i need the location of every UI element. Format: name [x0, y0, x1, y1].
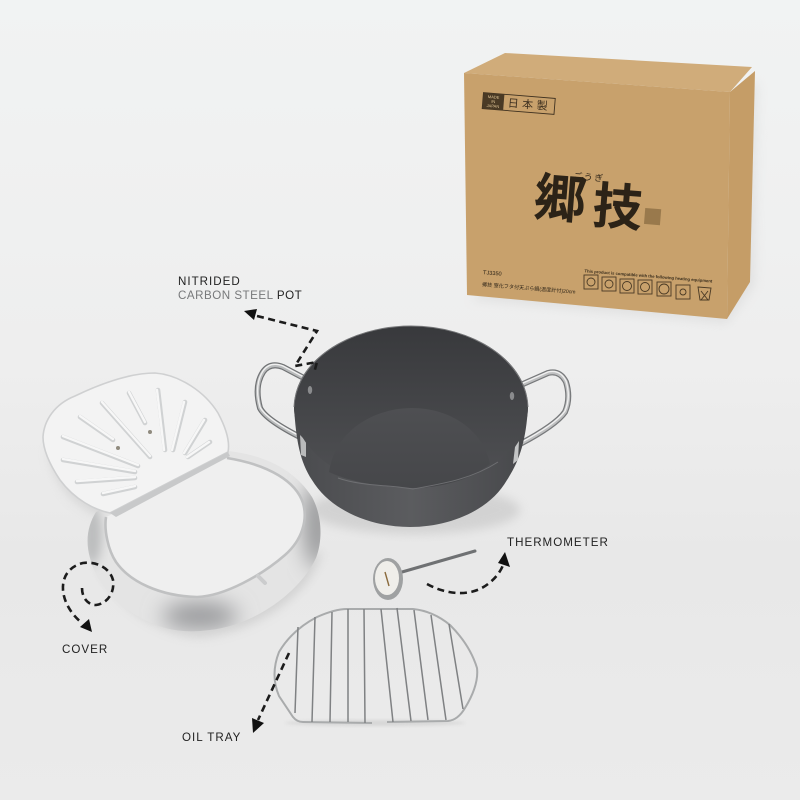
- pot interior: [294, 326, 528, 488]
- model number: TJ3350: [483, 270, 502, 278]
- cover inner lip: [105, 458, 305, 597]
- brand logo: ごうぎ: [573, 170, 605, 184]
- arrow: oil tray: [252, 653, 289, 733]
- label: oil tray: OIL TRAY: [182, 731, 241, 744]
- pot floor: [329, 408, 490, 488]
- oil tray: [274, 608, 477, 726]
- label: thermometer: THERMOMETER: [507, 536, 609, 549]
- tray frame: [274, 609, 477, 723]
- label: nitrided carbon steel pot: CARBON STEEL POT: [178, 289, 302, 302]
- left handle: [258, 364, 302, 438]
- box side: [727, 71, 755, 319]
- arrow: thermometer: [427, 552, 510, 593]
- made in japan badge: JAPAN: [486, 103, 500, 109]
- box top flap: [464, 53, 752, 92]
- handle brackets: [300, 435, 306, 457]
- heating icons: [584, 275, 711, 300]
- ring clip: [258, 576, 265, 583]
- cover: [43, 373, 332, 640]
- compatibility text: This product is compatible with the following heating equipment: [584, 268, 713, 284]
- pot rim highlight: [294, 326, 528, 407]
- made in japan badge: 日本製: [507, 96, 552, 113]
- pour spout: [338, 462, 498, 489]
- made in japan badge: MADE: [488, 94, 500, 100]
- cover opening: [105, 458, 305, 597]
- tray wires: [295, 608, 463, 723]
- arrow: cover: [63, 563, 113, 632]
- made in japan badge: IN: [491, 99, 496, 104]
- pot body: [294, 407, 528, 527]
- brand logo: 郷: [532, 169, 588, 231]
- brand logo: 技: [591, 178, 645, 238]
- lid hinge bar: [110, 452, 230, 517]
- right handle: [520, 371, 568, 444]
- made in japan badge: [482, 93, 555, 114]
- cover lid: [43, 373, 229, 513]
- product name: 郷技 窒化フタ付天ぷら鍋(温度計付)20cm: [482, 281, 576, 296]
- thermometer: [373, 551, 475, 600]
- pot: [258, 326, 568, 527]
- label: nitrided carbon steel pot: NITRIDED: [178, 275, 241, 288]
- lid slots: [63, 390, 210, 494]
- cardboard box: [464, 53, 758, 324]
- thermometer stem: [402, 551, 475, 572]
- thermometer dial: [373, 558, 403, 600]
- arrow: pot: [244, 309, 317, 373]
- cover shadow: [95, 550, 322, 637]
- lid screws: [116, 446, 120, 450]
- brand logo: [532, 167, 664, 239]
- label: cover: COVER: [62, 643, 108, 656]
- label: nitrided carbon steel pot: [178, 275, 302, 302]
- pot shadow: [310, 486, 520, 534]
- cover ring: [88, 474, 320, 632]
- box front label group: [468, 93, 726, 307]
- rivets: [308, 386, 312, 394]
- box front face: [464, 73, 730, 319]
